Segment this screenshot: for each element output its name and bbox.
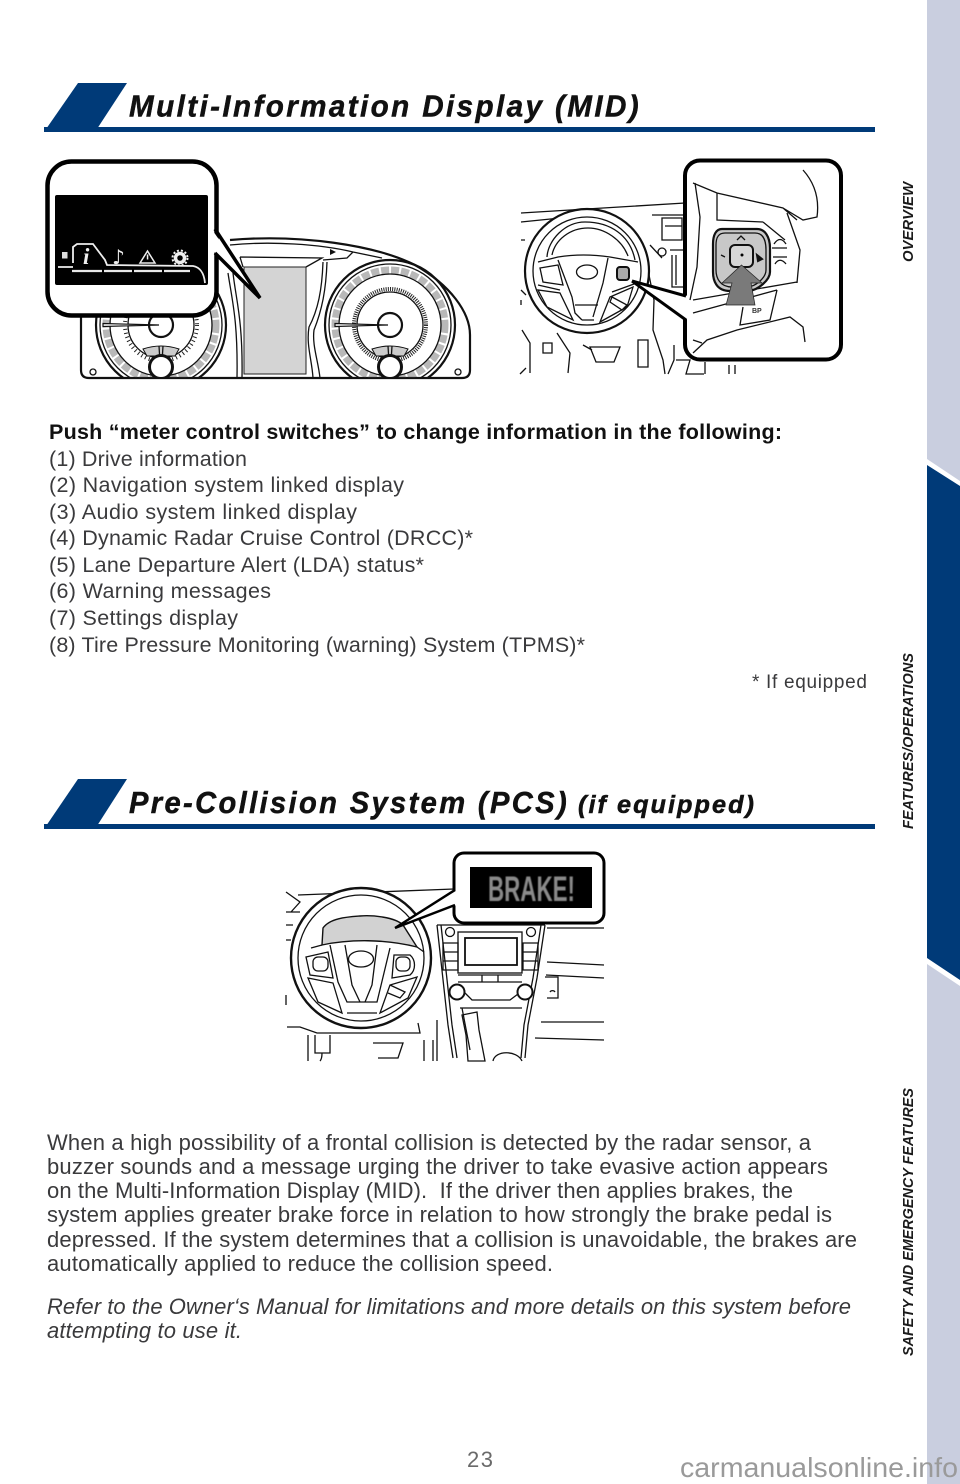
sidebar label: features/operations: FEATURES/OPERATIONS	[900, 653, 917, 829]
heading band: MID	[44, 83, 875, 132]
PCS description	[47, 1130, 857, 1276]
dashboard lines	[286, 889, 604, 1061]
callout pointer	[213, 229, 260, 298]
illustration: instrument cluster with callout	[48, 162, 470, 390]
control pad	[713, 229, 787, 291]
illustration: steering wheel switches	[520, 160, 841, 374]
callout pointer	[395, 890, 457, 928]
list of MID information: (8) Tire Pressure Monitoring (warning) System (TPMS)*	[49, 633, 586, 657]
list of MID information	[49, 447, 586, 657]
icon: information: i	[83, 244, 90, 269]
footnote: * If equipped	[752, 672, 867, 693]
right gauge	[325, 260, 455, 390]
callout box	[454, 853, 604, 923]
PCS description: buzzer sounds and a message urging the driver to take evasive action appears	[47, 1154, 828, 1179]
PCS description: depressed. If the system determines that a collision is unavoidable, the brakes are	[47, 1227, 857, 1252]
watermark: carmanualsonline.info	[680, 1452, 958, 1483]
steering wheel	[291, 888, 431, 1028]
icon: warning triangle	[140, 251, 155, 263]
icon: settings gear	[172, 250, 188, 266]
list of MID information: (3) Audio system linked display	[49, 500, 357, 524]
steering wheel	[525, 209, 649, 333]
heading band: PCS	[44, 779, 875, 829]
PCS description: system applies greater brake force in relation to how strongly the brake pedal is	[47, 1202, 832, 1227]
PCS description: automatically applied to reduce the collision speed.	[47, 1251, 553, 1276]
bottom switch mark: BP	[752, 308, 762, 315]
list of MID information: (1) Drive information	[49, 447, 247, 471]
left gauge	[94, 292, 228, 378]
list of MID information: (2) Navigation system linked display	[49, 473, 404, 497]
list of MID information: (6) Warning messages	[49, 579, 271, 603]
instructions heading: Push “meter control switches” to change information in the following:	[49, 420, 782, 444]
sidebar label: safety and emergency features: SAFETY AND EMERGENCY FEATURES	[900, 1088, 917, 1356]
list of MID information: (7) Settings display	[49, 606, 238, 630]
heading: PCS: (if equipped)	[578, 791, 756, 819]
icon: music note: ♪	[112, 245, 125, 269]
illustration: dashboard with BRAKE warning	[286, 853, 604, 1061]
callout box	[48, 162, 216, 316]
black MID screen	[55, 195, 208, 285]
sidebar navigation	[927, 0, 960, 1484]
owner's manual note	[47, 1294, 851, 1343]
BRAKE message	[470, 867, 592, 909]
PCS description: on the Multi-Information Display (MID). If the driver then applies brakes, the	[47, 1178, 793, 1203]
wheel spoke detail	[690, 170, 818, 353]
heading: PCS: Pre-Collision System (PCS)	[129, 785, 569, 820]
callout box	[685, 160, 841, 360]
gray display	[244, 267, 306, 374]
callout pointer	[632, 281, 688, 320]
heading: MID: Multi-Information Display (MID)	[129, 88, 641, 124]
list of MID information: (4) Dynamic Radar Cruise Control (DRCC)*	[49, 526, 474, 550]
BRAKE message: BRAKE!	[488, 870, 575, 909]
cluster outline	[81, 238, 470, 378]
PCS description: When a high possibility of a frontal collision is detected by the radar sensor, a	[47, 1130, 812, 1155]
dashboard lines	[520, 203, 735, 374]
owner's manual note: attempting to use it.	[47, 1318, 242, 1343]
up arrow	[722, 265, 762, 305]
list of MID information: (5) Lane Departure Alert (LDA) status*	[49, 553, 425, 577]
page number: 23	[467, 1447, 493, 1472]
sidebar label: overview: OVERVIEW	[900, 180, 917, 262]
owner's manual note: Refer to the Owner‘s Manual for limitations and more details on this system before	[47, 1294, 851, 1319]
